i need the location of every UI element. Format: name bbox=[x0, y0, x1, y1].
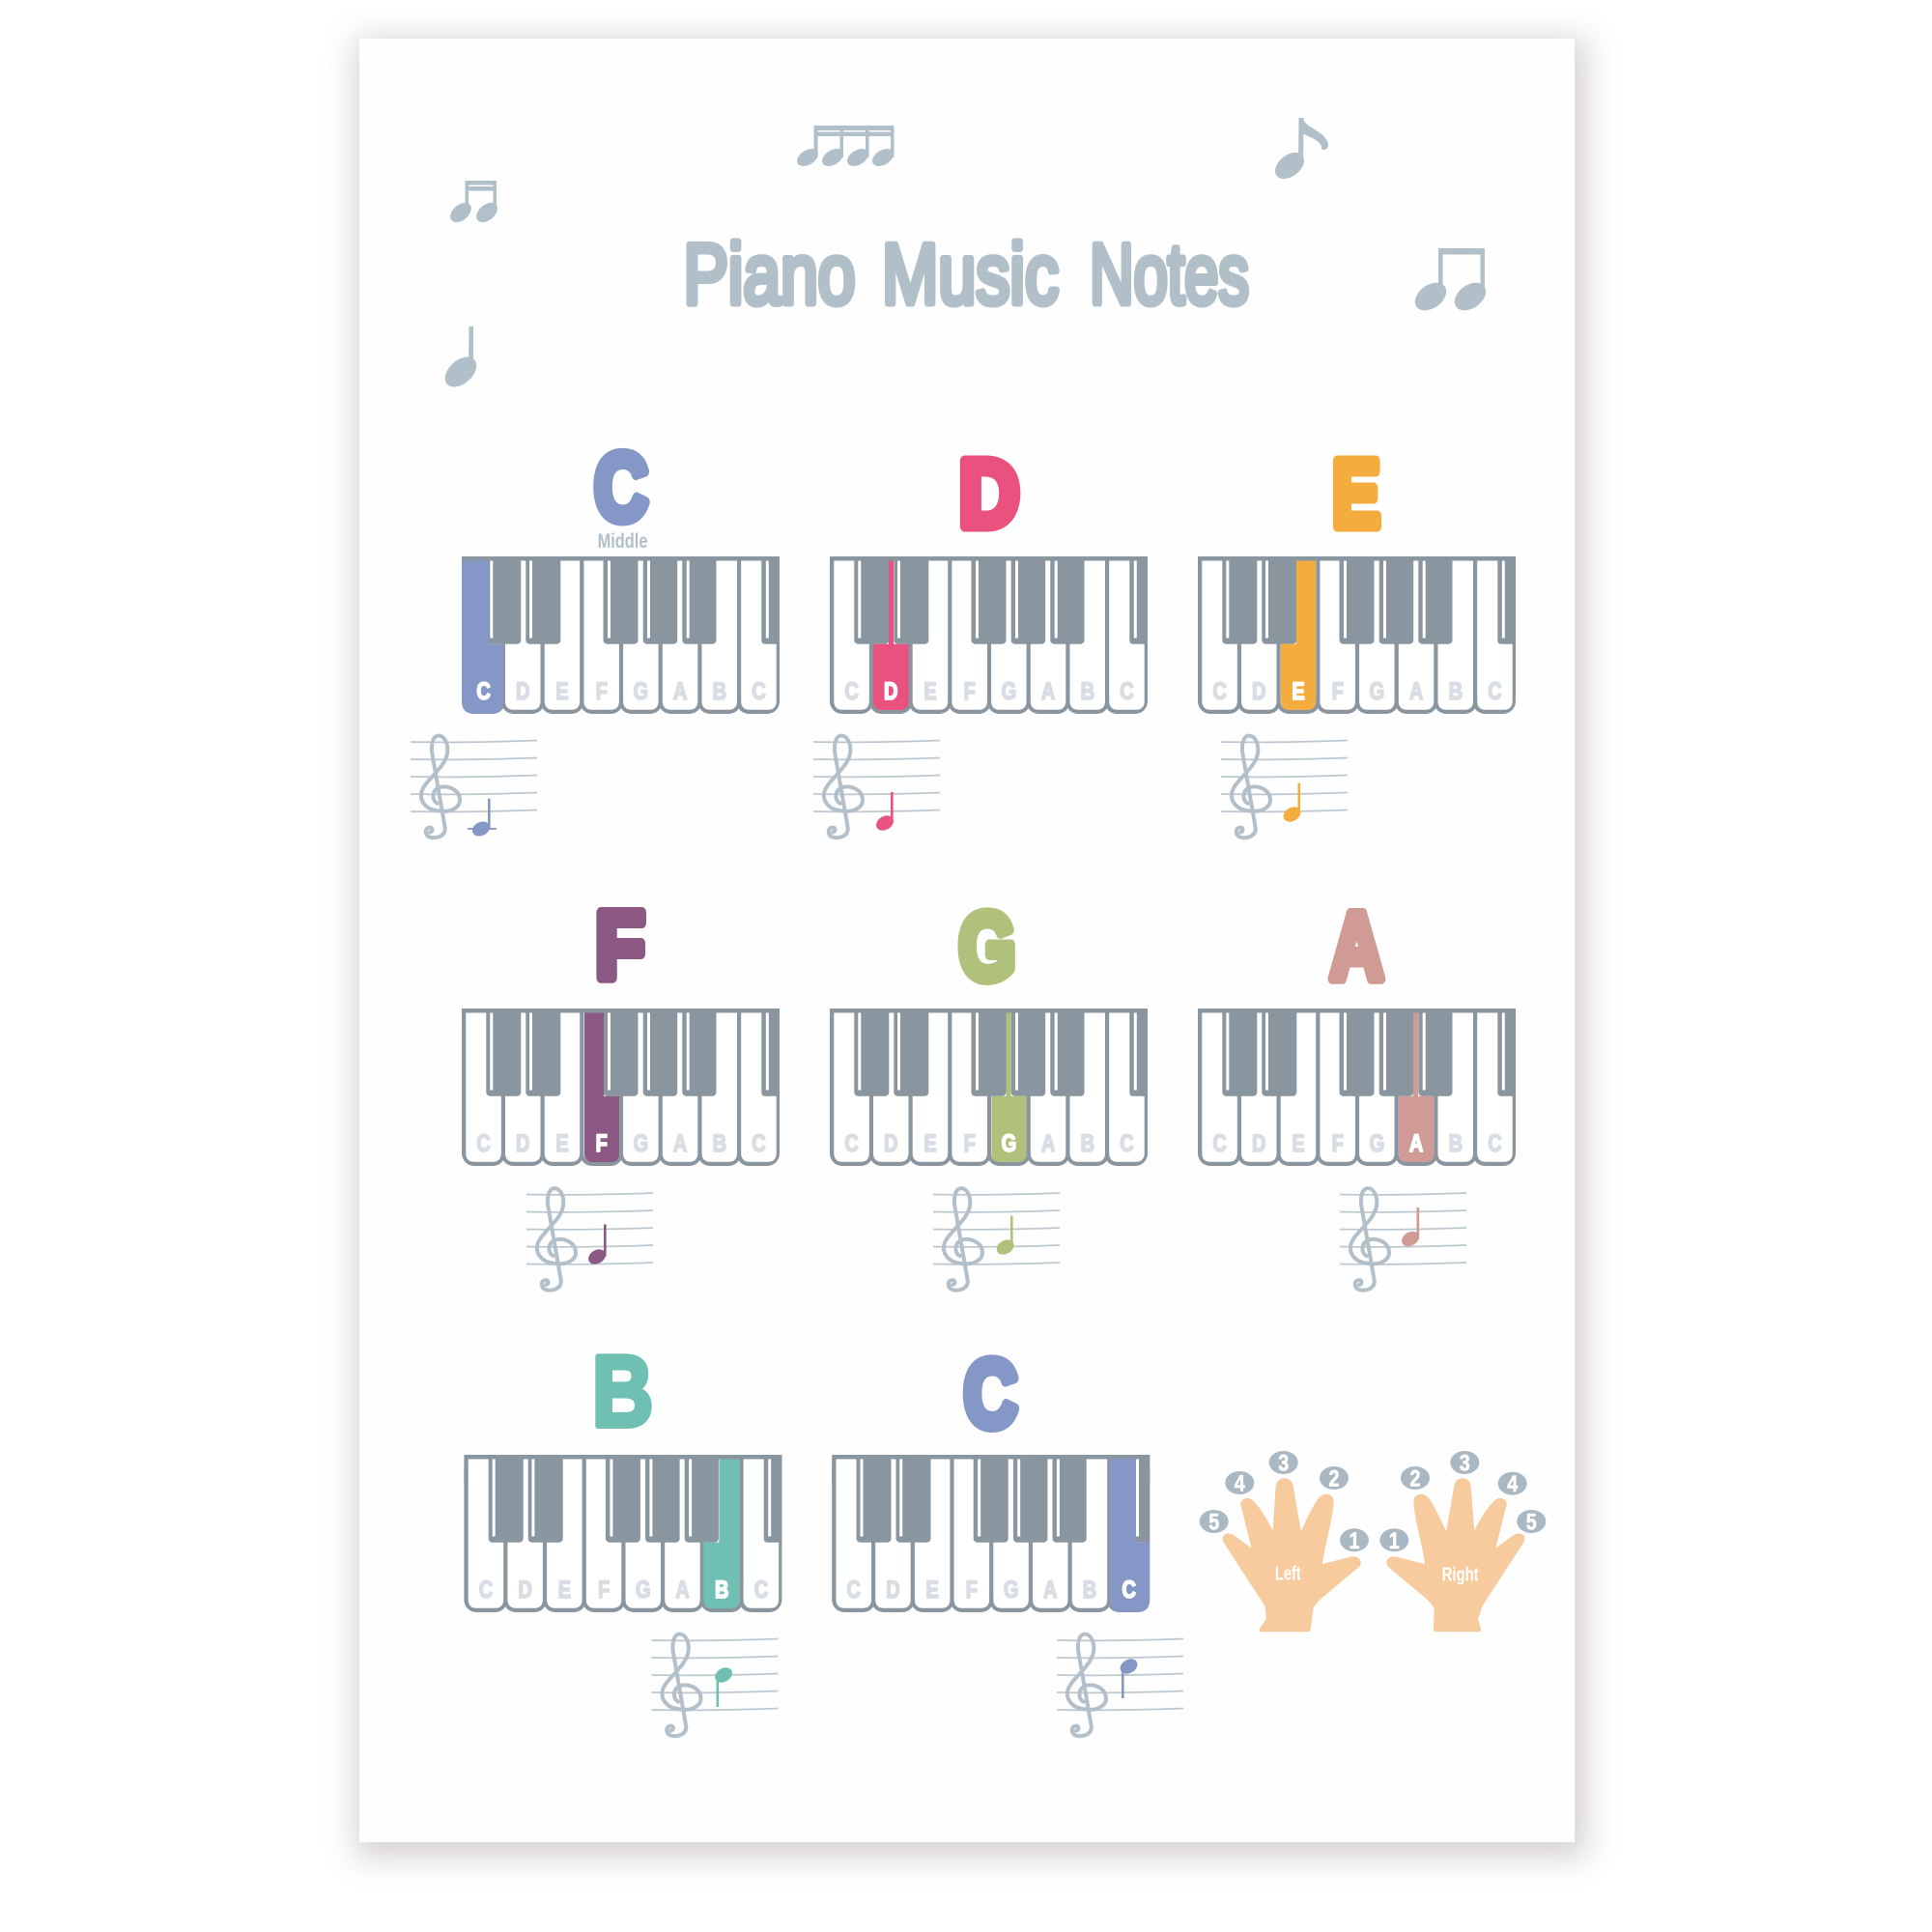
keyboard: C highlighted: B bbox=[713, 678, 726, 705]
staff: F note bbox=[526, 1188, 653, 1291]
keyboard: F highlighted: A bbox=[673, 1130, 687, 1157]
keyboard: D highlighted: G bbox=[1002, 678, 1016, 705]
keyboard: F highlighted: D bbox=[516, 1130, 529, 1157]
finger numbers: 1 bbox=[1389, 1528, 1400, 1554]
keyboard: C highlighted: A bbox=[673, 678, 687, 705]
keyboard: B highlighted: B bbox=[715, 1577, 728, 1604]
keyboard: high C highlighted: C bbox=[847, 1577, 861, 1604]
heading: G: G bbox=[959, 894, 1015, 1000]
keyboard: C highlighted: E bbox=[555, 678, 569, 705]
finger numbers: 3 bbox=[1278, 1451, 1289, 1476]
panel: E bbox=[1198, 441, 1516, 838]
keyboard: A highlighted: C bbox=[1212, 1130, 1227, 1157]
staff: A note bbox=[1340, 1188, 1466, 1291]
finger number bubbles bbox=[1200, 1451, 1546, 1551]
icon: beamed four notes bbox=[794, 126, 896, 170]
keyboard: D highlighted: C bbox=[1120, 678, 1134, 705]
keyboard: high C highlighted bbox=[832, 1455, 1150, 1612]
keyboard: B highlighted: E bbox=[558, 1577, 571, 1604]
icon: quarter note bbox=[440, 327, 482, 393]
keyboard: E highlighted bbox=[1198, 556, 1516, 714]
finger numbers: 4 bbox=[1507, 1471, 1519, 1497]
keyboard: A highlighted: A bbox=[1409, 1130, 1423, 1157]
keyboard: B highlighted bbox=[464, 1455, 781, 1612]
staff: high C note bbox=[1057, 1634, 1183, 1736]
keyboard: A highlighted: B bbox=[1449, 1130, 1463, 1157]
panel: finger numbering hands bbox=[1200, 1451, 1546, 1630]
keyboard: high C highlighted: E bbox=[926, 1577, 939, 1604]
keyboard: D highlighted: C bbox=[844, 678, 859, 705]
keyboard: A highlighted: E bbox=[1292, 1130, 1305, 1157]
heading: A: A bbox=[1330, 893, 1383, 1000]
finger numbers: 1 bbox=[1349, 1528, 1360, 1554]
icon: right hand: Right bbox=[1442, 1565, 1479, 1586]
title: Piano bbox=[684, 226, 856, 322]
keyboard: G highlighted: G bbox=[1002, 1130, 1016, 1157]
panel: middle C bbox=[411, 434, 780, 838]
keyboard: C highlighted: C bbox=[476, 678, 491, 705]
finger numbers: 3 bbox=[1460, 1451, 1470, 1476]
keyboard: F highlighted bbox=[462, 1009, 780, 1166]
keyboard: G highlighted: B bbox=[1081, 1130, 1094, 1157]
panel: D bbox=[813, 440, 1148, 838]
icon: eighth note bbox=[1270, 118, 1328, 185]
icon: left hand: Left bbox=[1275, 1563, 1301, 1584]
keyboard: high C highlighted: B bbox=[1083, 1577, 1096, 1604]
keyboard: high C highlighted: A bbox=[1043, 1577, 1057, 1604]
keyboard: D highlighted: B bbox=[1081, 678, 1094, 705]
keyboard: G highlighted: C bbox=[844, 1130, 859, 1157]
title: Notes bbox=[1090, 226, 1249, 322]
finger numbers bbox=[1208, 1451, 1537, 1554]
keyboard: G highlighted: D bbox=[884, 1130, 897, 1157]
icon: right hand bbox=[1389, 1481, 1522, 1630]
keyboard: E highlighted: C bbox=[1488, 678, 1502, 705]
keyboard: A highlighted bbox=[1198, 1009, 1516, 1166]
keyboard: G highlighted: C bbox=[1120, 1130, 1134, 1157]
keyboard: D highlighted: F bbox=[964, 678, 976, 705]
finger numbers: 5 bbox=[1526, 1509, 1537, 1536]
keyboard: G highlighted: E bbox=[923, 1130, 937, 1157]
keyboard: G highlighted bbox=[830, 1009, 1148, 1166]
keyboard: A highlighted: G bbox=[1370, 1130, 1384, 1157]
keyboard: E highlighted: F bbox=[1332, 678, 1344, 705]
keyboard: G highlighted: A bbox=[1041, 1130, 1055, 1157]
keyboard: E highlighted: E bbox=[1292, 678, 1305, 705]
heading: D: D bbox=[959, 440, 1019, 547]
title bbox=[684, 226, 1249, 322]
keyboard: high C highlighted: C bbox=[1122, 1577, 1136, 1604]
heading: B: B bbox=[592, 1336, 653, 1448]
icon: beamed eighth notes bbox=[1409, 248, 1492, 316]
keyboard: D highlighted bbox=[830, 556, 1148, 714]
keyboard: E highlighted: B bbox=[1449, 678, 1463, 705]
keyboard: B highlighted: C bbox=[479, 1577, 493, 1604]
keyboard: C highlighted bbox=[462, 556, 780, 714]
keyboard: high C highlighted: F bbox=[966, 1577, 978, 1604]
keyboard: E highlighted: G bbox=[1370, 678, 1384, 705]
panel: A bbox=[1198, 893, 1516, 1291]
heading: E: E bbox=[1332, 441, 1380, 547]
keyboard: B highlighted: F bbox=[598, 1577, 610, 1604]
staff: D note bbox=[813, 736, 940, 838]
finger numbers: 5 bbox=[1208, 1509, 1219, 1536]
icon: double-beamed pair bbox=[446, 181, 501, 226]
keyboard: E highlighted: C bbox=[1212, 678, 1227, 705]
poster sheet bbox=[359, 39, 1575, 1842]
title: Music bbox=[882, 226, 1059, 322]
panel: B bbox=[464, 1336, 781, 1736]
caption: Middle: Middle bbox=[598, 529, 647, 552]
keyboard: A highlighted: D bbox=[1252, 1130, 1265, 1157]
heading: C: C bbox=[594, 434, 648, 540]
finger numbers: 2 bbox=[1329, 1466, 1339, 1492]
staff: middle C note bbox=[411, 736, 537, 838]
finger numbers: 4 bbox=[1235, 1470, 1245, 1497]
panel: F bbox=[462, 894, 780, 1291]
keyboard: E highlighted: A bbox=[1409, 678, 1423, 705]
icon: left hand bbox=[1225, 1481, 1358, 1630]
keyboard: F highlighted: C bbox=[476, 1130, 491, 1157]
keyboard: F highlighted: G bbox=[634, 1130, 648, 1157]
keyboard: B highlighted: A bbox=[675, 1577, 690, 1604]
keyboard: A highlighted: C bbox=[1488, 1130, 1502, 1157]
keyboard: A highlighted: F bbox=[1332, 1130, 1344, 1157]
staff: B note bbox=[651, 1634, 779, 1736]
keyboard: C highlighted: G bbox=[634, 678, 648, 705]
keyboard: high C highlighted: G bbox=[1004, 1577, 1018, 1604]
heading: C: C bbox=[964, 1340, 1017, 1447]
keyboard: G highlighted: F bbox=[964, 1130, 976, 1157]
keyboard: F highlighted: C bbox=[752, 1130, 766, 1157]
keyboard: C highlighted: D bbox=[516, 678, 529, 705]
panel: high C bbox=[832, 1340, 1183, 1736]
staff: E note bbox=[1221, 736, 1348, 838]
keyboard: C highlighted: C bbox=[752, 678, 766, 705]
keyboard: D highlighted: A bbox=[1041, 678, 1055, 705]
keyboard: B highlighted: C bbox=[754, 1577, 768, 1604]
keyboard: C highlighted: F bbox=[596, 678, 608, 705]
keyboard: B highlighted: D bbox=[518, 1577, 532, 1604]
keyboard: F highlighted: E bbox=[555, 1130, 569, 1157]
keyboard: high C highlighted: D bbox=[886, 1577, 900, 1604]
finger numbers: 2 bbox=[1410, 1466, 1420, 1492]
panel: G bbox=[830, 894, 1148, 1291]
keyboard: F highlighted: B bbox=[713, 1130, 726, 1157]
heading: F: F bbox=[596, 894, 644, 999]
staff: G note bbox=[933, 1188, 1060, 1291]
keyboard: D highlighted: E bbox=[923, 678, 937, 705]
keyboard: B highlighted: G bbox=[636, 1577, 651, 1604]
keyboard: D highlighted: D bbox=[884, 678, 897, 705]
keyboard: F highlighted: F bbox=[596, 1130, 608, 1157]
keyboard: E highlighted: D bbox=[1252, 678, 1265, 705]
